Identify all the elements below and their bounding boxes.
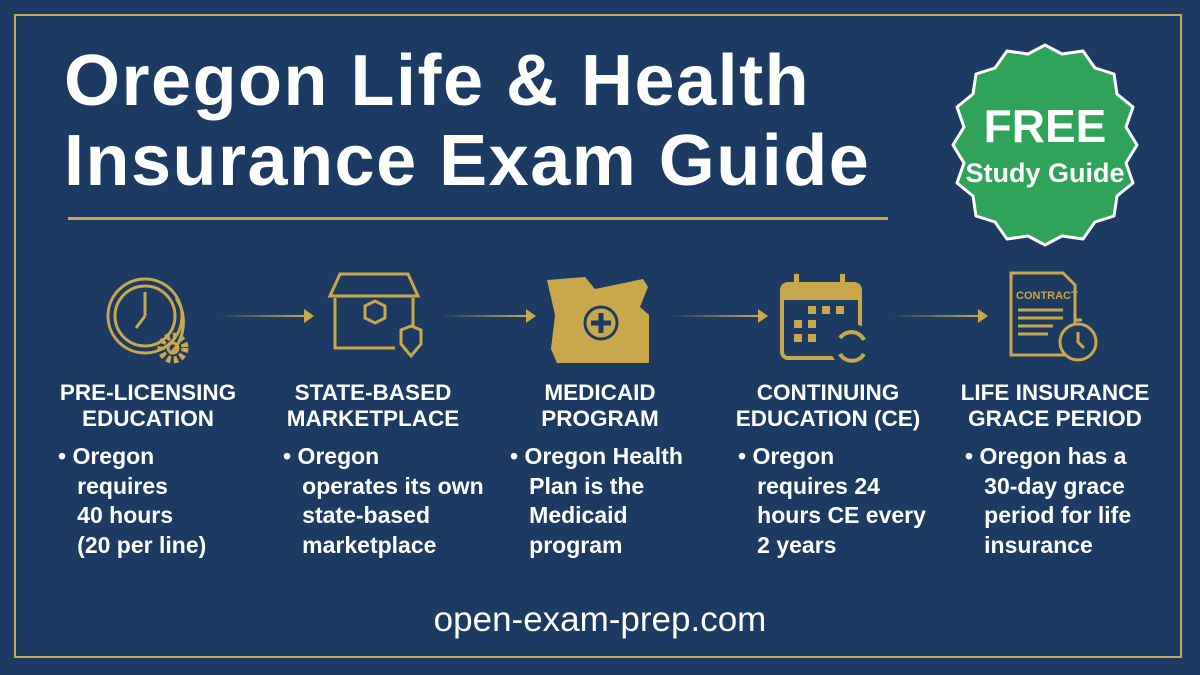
text: operates its own xyxy=(302,472,484,498)
arrow 4 xyxy=(892,315,980,317)
icon: contract stopwatch: CONTRACT xyxy=(1016,290,1078,302)
text: • Oregon xyxy=(58,443,154,469)
text: hours CE every xyxy=(757,502,926,528)
icon: store xyxy=(328,272,422,358)
icon: calendar xyxy=(780,274,866,363)
badge: free study guide xyxy=(952,44,1138,246)
arrow 2 xyxy=(440,315,528,317)
text: insurance xyxy=(984,532,1093,558)
icon: contract stopwatch xyxy=(1010,272,1098,362)
text: GRACE PERIOD xyxy=(968,406,1142,431)
text: program xyxy=(529,532,622,558)
text: CONTINUING xyxy=(757,380,899,405)
text: • Oregon Health xyxy=(510,443,683,469)
text: Medicaid xyxy=(529,502,628,528)
text: LIFE INSURANCE xyxy=(961,380,1149,405)
text: EDUCATION (CE) xyxy=(736,406,920,431)
title: Insurance Exam Guide xyxy=(64,121,870,201)
text: MARKETPLACE xyxy=(287,406,459,431)
text: • Oregon xyxy=(283,443,379,469)
text: • Oregon has a xyxy=(965,443,1126,469)
text: period for life xyxy=(984,502,1131,528)
text: EDUCATION xyxy=(82,406,214,431)
text: (20 per line) xyxy=(77,532,206,558)
column 2 xyxy=(283,380,484,558)
icon: clock gear xyxy=(106,278,188,364)
arrow 1 xyxy=(218,315,306,317)
text: requires 24 xyxy=(757,472,880,498)
title: Oregon Life & Health xyxy=(64,41,810,121)
text: PRE-LICENSING xyxy=(60,380,236,405)
column 5 xyxy=(961,380,1149,558)
badge: free study guide: FREE xyxy=(984,100,1106,152)
text: STATE-BASED xyxy=(295,380,451,405)
column 1 xyxy=(58,380,236,558)
footer url: open-exam-prep.com xyxy=(434,600,766,639)
column 4 xyxy=(736,380,926,558)
text: 2 years xyxy=(757,532,836,558)
text: 40 hours xyxy=(77,502,173,528)
text: state-based xyxy=(302,502,430,528)
text: PROGRAM xyxy=(541,406,659,431)
icon: oregon medicaid xyxy=(547,277,649,363)
title xyxy=(64,41,870,201)
text: 30-day grace xyxy=(984,472,1125,498)
text: marketplace xyxy=(302,532,436,558)
column 3 xyxy=(510,380,683,558)
text: requires xyxy=(77,472,168,498)
text: MEDICAID xyxy=(544,380,656,405)
text: Plan is the xyxy=(529,472,644,498)
badge: free study guide: Study Guide xyxy=(965,158,1125,188)
arrow 3 xyxy=(670,315,760,317)
text: • Oregon xyxy=(738,443,834,469)
